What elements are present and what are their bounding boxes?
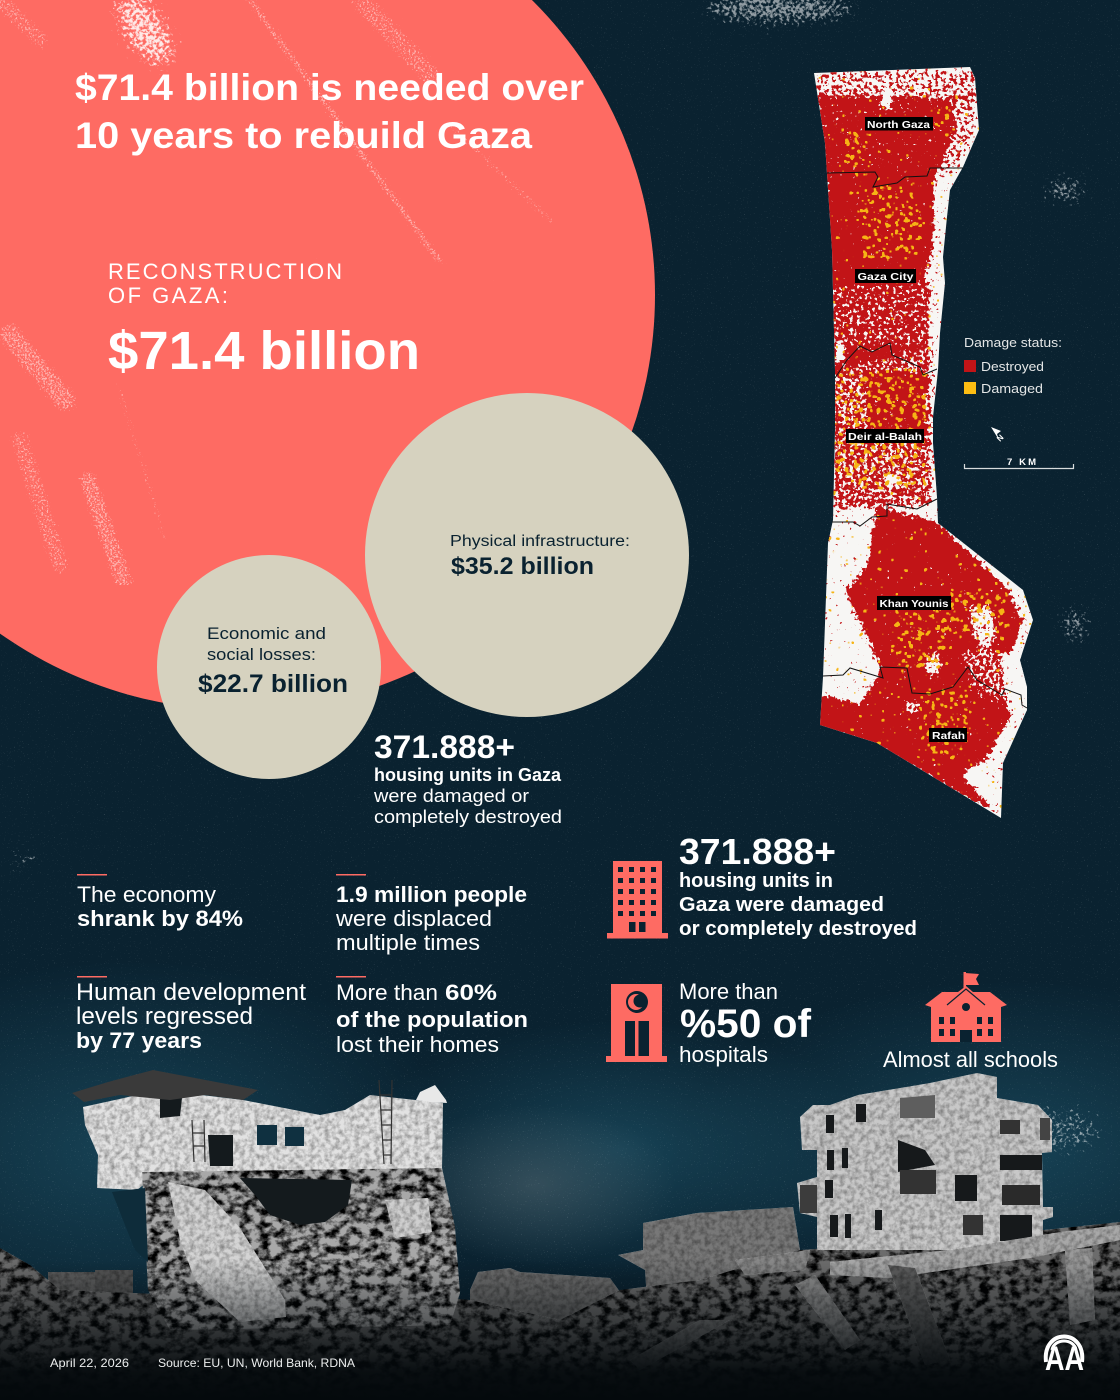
north arrow: N <box>995 433 1006 443</box>
footer: date and source: Source: EU, UN, World Bank, RDNA <box>158 1356 355 1370</box>
map legend <box>964 335 1062 396</box>
big coral circle: reconstruction total <box>0 0 655 710</box>
photo: collapsed slabs right <box>630 1225 1120 1370</box>
map label: Gaza City <box>855 269 916 283</box>
title: $71.4 billion is needed over <box>75 67 584 108</box>
stat: housing units small: were damaged or <box>373 786 529 806</box>
stat: homes lost: lost their homes <box>336 1032 499 1057</box>
rubble ground <box>0 1222 1120 1400</box>
circle: physical infrastructure <box>365 393 689 717</box>
stat: housing units small: completely destroyed <box>374 807 562 827</box>
reconstruction total label <box>108 259 420 381</box>
stat: economy: shrank by 84% <box>77 906 243 931</box>
icon: school <box>925 972 1007 1042</box>
circle: economic and social losses: Economic and <box>207 625 326 643</box>
map governorate borders <box>823 168 1027 708</box>
stat: hospitals: %50 of <box>680 1002 812 1046</box>
fallen slab <box>168 1182 286 1322</box>
map: Gaza Strip damage <box>814 67 1033 818</box>
photo: distant buildings <box>48 1207 800 1330</box>
stat: homes lost <box>336 976 528 1057</box>
icon: hospital <box>606 984 667 1062</box>
map legend: Damage status: <box>964 335 1062 350</box>
stat: homes lost: of the population <box>336 1007 528 1032</box>
map damaged points <box>818 68 1032 808</box>
stat: economy <box>77 874 243 931</box>
ladder <box>192 1080 392 1164</box>
map label: Khan Younis: Khan Younis <box>880 598 949 610</box>
map label: Rafah: Rafah <box>932 730 965 742</box>
building dark openings <box>800 1095 1050 1241</box>
stat: schools: Almost all schools <box>883 1047 1058 1072</box>
reconstruction total label: $71.4 billion <box>108 321 420 381</box>
stat: hospitals <box>679 979 812 1067</box>
photo: destroyed building right <box>797 1073 1053 1250</box>
stat: human development: levels regressed <box>76 1003 253 1030</box>
bottom dark fade <box>0 1260 1120 1400</box>
map label: Rafah <box>929 728 967 742</box>
stat: hospitals: hospitals <box>679 1042 768 1067</box>
stat: housing units large: Gaza were damaged <box>679 894 884 916</box>
stat: human development: by 77 years <box>76 1028 202 1053</box>
map damage speckle <box>814 67 1032 813</box>
circle: physical infrastructure: $35.2 billion <box>451 553 594 580</box>
map legend: Destroyed <box>981 359 1044 374</box>
stat: homes lost: 60% <box>445 980 497 1005</box>
stat: housing units large: 371.888+ <box>679 831 836 872</box>
reconstruction total label: RECONSTRUCTION <box>108 259 342 284</box>
scale bar: 7 KM <box>1007 457 1036 468</box>
upper walls <box>83 1090 443 1190</box>
icon: apartment building <box>607 861 668 938</box>
scale bar <box>964 457 1074 468</box>
map label: Deir al-Balah: Deir al-Balah <box>848 431 922 443</box>
map legend: Damaged <box>981 381 1043 396</box>
stat: housing units small: housing units in Gaza <box>374 765 562 785</box>
circle: physical infrastructure: Physical infrastructure: <box>450 533 630 550</box>
map label: Gaza City: Gaza City <box>858 271 914 283</box>
circle: bright scuff <box>110 0 182 74</box>
map label: North Gaza: North Gaza <box>867 119 930 131</box>
stat: human development <box>76 976 306 1053</box>
stat: housing units large: housing units in <box>679 870 833 892</box>
circle: economic and social losses: $22.7 billion <box>198 670 348 698</box>
circle: economic and social losses: social losses: <box>207 646 316 664</box>
photo: destroyed building left <box>72 1070 460 1330</box>
map land <box>814 67 1033 818</box>
stat: hospitals: More than <box>679 979 778 1004</box>
footer: date and source: April 22, 2026 <box>50 1356 129 1370</box>
stat: housing units small <box>373 729 562 827</box>
stat: housing units large <box>679 831 917 940</box>
water tank <box>416 1085 447 1103</box>
roof <box>72 1070 258 1102</box>
title <box>75 67 584 156</box>
title: 10 years to rebuild Gaza <box>75 115 532 156</box>
lower structure <box>142 1168 460 1330</box>
reconstruction total label: OF GAZA: <box>108 283 228 308</box>
map holes <box>825 84 1031 820</box>
stat: displaced: 1.9 million people <box>336 882 527 907</box>
stat: displaced: multiple times <box>336 930 480 955</box>
stat: housing units large: or completely destroyed <box>679 918 917 940</box>
circle: economic and social losses <box>157 555 381 779</box>
stat: displaced <box>335 874 527 955</box>
stat: economy: The economy <box>77 882 216 907</box>
stat: displaced: were displaced <box>335 906 492 931</box>
building windows showing sky <box>257 1125 304 1146</box>
stat: human development: Human development <box>76 979 306 1006</box>
stat: homes lost: More than <box>336 980 438 1005</box>
stat: housing units small: 371.888+ <box>374 729 515 765</box>
footer: date and source <box>50 1356 355 1370</box>
north arrow <box>991 427 1006 443</box>
logo: Anadolu Agency: AA <box>1045 1340 1084 1378</box>
